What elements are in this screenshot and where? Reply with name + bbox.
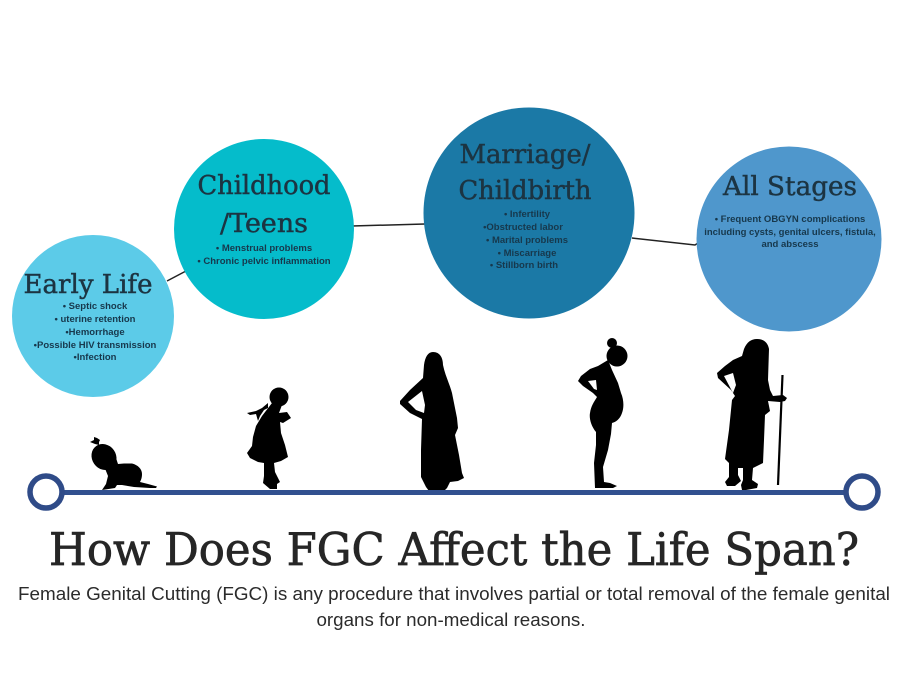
heading: marriage and childbirth: Marriage/ bbox=[460, 140, 591, 170]
heading: all stages: All Stages bbox=[722, 172, 857, 202]
list: childhood effects: • Chronic pelvic inflammation bbox=[197, 256, 331, 267]
list: early life effects: •Hemorrhage bbox=[65, 327, 125, 338]
list: early life effects: •Infection bbox=[74, 352, 117, 363]
heading: childhood and teens: /Teens bbox=[220, 209, 308, 239]
icon: pregnant woman silhouette bbox=[578, 338, 628, 488]
icon: running girl silhouette bbox=[247, 388, 291, 489]
list: early life effects: • Septic shock bbox=[63, 301, 128, 312]
list: marriage effects: • Stillborn birth bbox=[490, 260, 558, 271]
connector: early life to childhood bbox=[167, 271, 186, 281]
connector: marriage to all stages bbox=[632, 238, 698, 245]
list: marriage effects: • Marital problems bbox=[486, 235, 568, 246]
text: all stages effects: and abscess bbox=[761, 239, 819, 250]
panel: marriage and childbirth bbox=[424, 108, 634, 318]
connector: childhood to marriage bbox=[352, 224, 425, 226]
heading: marriage and childbirth bbox=[458, 140, 592, 206]
icon: standing woman silhouette bbox=[400, 352, 464, 491]
heading: childhood and teens bbox=[198, 171, 330, 239]
timeline end marker bbox=[846, 476, 878, 508]
list: early life effects: •Possible HIV transmission bbox=[34, 340, 157, 351]
timeline bbox=[30, 476, 878, 508]
text: all stages effects bbox=[704, 214, 876, 250]
timeline start marker bbox=[30, 476, 62, 508]
text: all stages effects: including cysts, genital ulcers, fistula, bbox=[704, 227, 876, 238]
list: early life effects: • uterine retention bbox=[55, 314, 136, 325]
icon: crawling baby silhouette bbox=[86, 437, 157, 490]
description text bbox=[18, 584, 890, 630]
panel: childhood and teens bbox=[174, 139, 354, 319]
description text: Female Genital Cutting (FGC) is any procedure that involves partial or total removal of the female genital bbox=[18, 584, 890, 604]
list: childhood effects bbox=[197, 243, 331, 267]
list: early life effects bbox=[34, 301, 157, 363]
panel: all stages bbox=[696, 146, 882, 332]
icon: elderly woman with walking stick silhouette bbox=[717, 339, 787, 490]
list: marriage effects bbox=[483, 209, 568, 271]
list: marriage effects: • Infertility bbox=[504, 209, 551, 220]
list: childhood effects: • Menstrual problems bbox=[216, 243, 312, 254]
heading: marriage and childbirth: Childbirth bbox=[458, 176, 592, 206]
walking stick bbox=[778, 375, 782, 485]
heading: childhood and teens: Childhood bbox=[198, 171, 330, 201]
list: marriage effects: • Miscarriage bbox=[498, 248, 556, 259]
description text: organs for non-medical reasons. bbox=[316, 610, 586, 630]
panel: early life bbox=[12, 235, 174, 397]
heading: early life: Early Life bbox=[24, 270, 152, 300]
title: How Does FGC Affect the Life Span? bbox=[49, 523, 859, 576]
list: marriage effects: •Obstructed labor bbox=[483, 222, 563, 233]
text: all stages effects: • Frequent OBGYN complications bbox=[715, 214, 865, 225]
